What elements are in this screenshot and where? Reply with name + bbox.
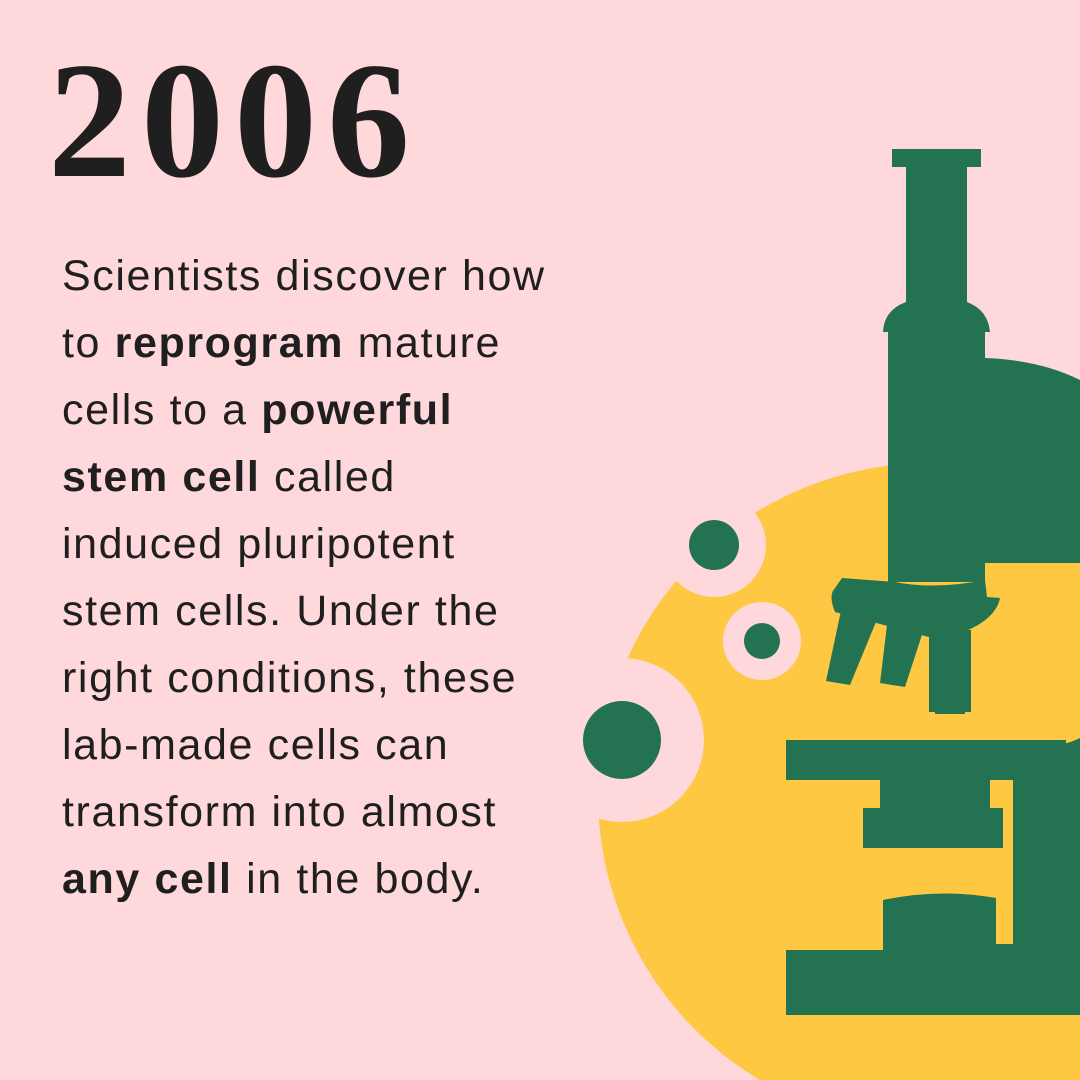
yellow circle backdrop [598,463,1080,1080]
text block: description: any cell in the body. [62,855,484,903]
microscope [786,149,1080,1015]
text block: description: stem cell called [62,453,396,501]
title: year: 2006 [48,28,420,212]
text block: description: cells to a powerful [62,386,453,434]
text block: description: stem cells. Under the [62,587,499,635]
bubbles [540,493,801,822]
text block: description: Scientists discover how [62,252,546,300]
text block: description: lab-made cells can [62,721,449,769]
text block: description [62,252,546,903]
text block: description: to reprogram mature [62,319,501,367]
text block: description: right conditions, these [62,654,517,702]
text block: description: transform into almost [62,788,497,836]
text block: description: induced pluripotent [62,520,456,568]
